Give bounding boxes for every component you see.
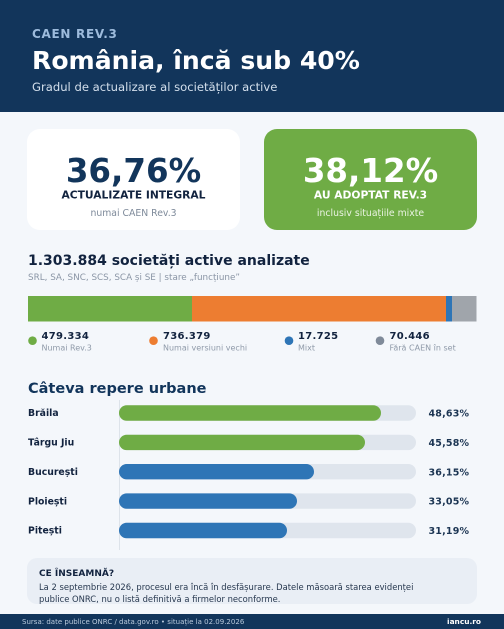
big number: 36,76%: [66, 152, 201, 190]
panel label: AU ADOPTAT REV.3: [314, 188, 427, 202]
row: Târgu Jiu: [28, 435, 470, 450]
big number: 38,12%: [303, 152, 438, 190]
panel: 38,12%: [264, 129, 477, 230]
bar chart: cities: [28, 405, 470, 538]
section heading: urban: Câteva repere urbane: [28, 381, 207, 397]
row: Ploiești: 33,05%: [428, 497, 470, 508]
legend item: Numai Rev.3: 479.334: [42, 331, 89, 342]
row: Brăila: Brăila: [28, 408, 59, 419]
callout heading: CE ÎNSEAMNĂ?: [39, 567, 114, 579]
title: România, încă sub 40%: [32, 46, 360, 75]
legend item: Mixt: [285, 331, 338, 352]
legend item: Fără CAEN în set: 70.446: [390, 331, 430, 342]
callout body: publice ONRC, nu o listă definitivă a firmelor neconforme.: [39, 594, 280, 604]
source: Sursa: date publice ONRC / data.gov.ro • situație la 02.09.2026: [22, 617, 245, 627]
legend item: Numai versiuni vechi: [149, 331, 247, 352]
row: Brăila: 48,63%: [428, 408, 470, 420]
callout: what it means: [27, 558, 477, 604]
row: Brăila: [28, 405, 470, 421]
subtitle: Gradul de actualizare al societăților active: [32, 80, 277, 94]
legend item: Mixt: 17.725: [298, 331, 338, 342]
legend item: Mixt: Mixt: [298, 344, 315, 352]
footer: [0, 614, 504, 629]
stacked bar: [28, 296, 476, 322]
legend item: Numai versiuni vechi: 736.379: [163, 331, 211, 342]
legend item: Numai Rev.3: [28, 331, 92, 352]
row: Pitești: Pitești: [28, 526, 62, 537]
legend item: Numai versiuni vechi: Numai versiuni vechi: [163, 344, 247, 352]
site: iancu.ro: [447, 617, 481, 626]
row: Târgu Jiu: Târgu Jiu: [28, 438, 74, 448]
row: Ploiești: [28, 493, 470, 509]
header banner: [0, 0, 504, 112]
section heading: companies analysed: 1.303.884 societăți active analizate: [28, 253, 310, 269]
row: București: 36,15%: [428, 467, 470, 478]
row: Pitești: [28, 523, 470, 538]
panel label: ACTUALIZATE INTEGRAL: [62, 188, 206, 202]
row: Ploiești: Ploiești: [28, 496, 67, 507]
row: București: [28, 464, 470, 479]
panel: 36,76%: [27, 129, 240, 230]
legend item: Fără CAEN în set: [376, 331, 456, 352]
legend item: Numai Rev.3: Numai Rev.3: [42, 344, 92, 352]
row: București: București: [28, 467, 78, 478]
panel note: inclusiv situațiile mixte: [317, 208, 424, 219]
callout body: La 2 septembrie 2026, procesul era încă în desfășurare. Datele măsoară starea evidenței: [39, 582, 413, 593]
legend item: Fără CAEN în set: Fără CAEN în set: [390, 344, 456, 352]
eyebrow: CAEN REV.3: [32, 27, 118, 41]
row: Târgu Jiu: 45,58%: [428, 438, 470, 449]
section subheading: SRL, SA, SNC, SCS, SCA și SE | stare „funcțiune”: [28, 273, 240, 283]
row: Pitești: 31,19%: [428, 526, 470, 537]
legend: [28, 331, 456, 352]
panel note: numai CAEN Rev.3: [90, 208, 177, 219]
